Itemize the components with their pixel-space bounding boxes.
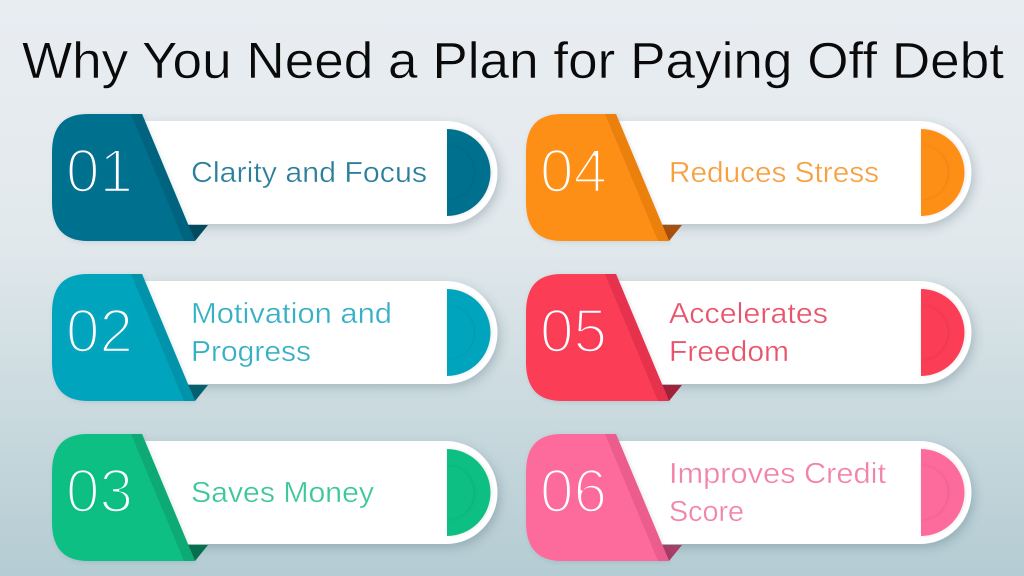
card 01: Clarity and Focus: [52, 114, 498, 241]
fold triangle: [662, 545, 682, 561]
half circle: [447, 129, 490, 216]
badge: [526, 274, 669, 401]
label: Clarity and Focus: [191, 157, 427, 189]
half circle: [447, 289, 490, 376]
white pill: [614, 121, 972, 224]
white pill: [614, 441, 972, 544]
half circle: [447, 449, 490, 536]
label line 2: Freedom: [669, 336, 789, 368]
number: 04: [540, 137, 607, 205]
label line 2: Progress: [191, 336, 311, 368]
badge: [52, 434, 195, 561]
badge: [52, 274, 195, 401]
fold triangle: [188, 225, 208, 241]
white pill: [140, 281, 498, 384]
number: 06: [540, 457, 607, 525]
card 06: Improves Credit Score: [526, 434, 972, 561]
number: 03: [66, 457, 133, 525]
badge: [526, 114, 669, 241]
fold triangle: [662, 225, 682, 241]
title: Why You Need a Plan for Paying Off Debt: [22, 32, 1004, 89]
label: Reduces Stress: [669, 157, 879, 189]
half circle: [921, 449, 964, 536]
fold triangle: [188, 545, 208, 561]
label: Accelerates: [669, 298, 828, 330]
half circle: [921, 129, 964, 216]
card 03: Saves Money: [52, 434, 498, 561]
card 04: Reduces Stress: [526, 114, 972, 241]
label: Saves Money: [191, 477, 375, 509]
white pill: [614, 281, 972, 384]
number: 05: [540, 297, 607, 365]
number: 02: [66, 297, 133, 365]
fold triangle: [188, 385, 208, 401]
fold triangle: [662, 385, 682, 401]
white pill: [140, 121, 498, 224]
number: 01: [66, 137, 133, 205]
badge: [52, 114, 195, 241]
white pill: [140, 441, 498, 544]
label line 2: Score: [669, 496, 744, 528]
badge: [526, 434, 669, 561]
card 05: Accelerates Freedom: [526, 274, 972, 401]
label: Motivation and: [191, 298, 392, 330]
card 02: Motivation and Progress: [52, 274, 498, 401]
label: Improves Credit: [669, 458, 886, 490]
half circle: [921, 289, 964, 376]
